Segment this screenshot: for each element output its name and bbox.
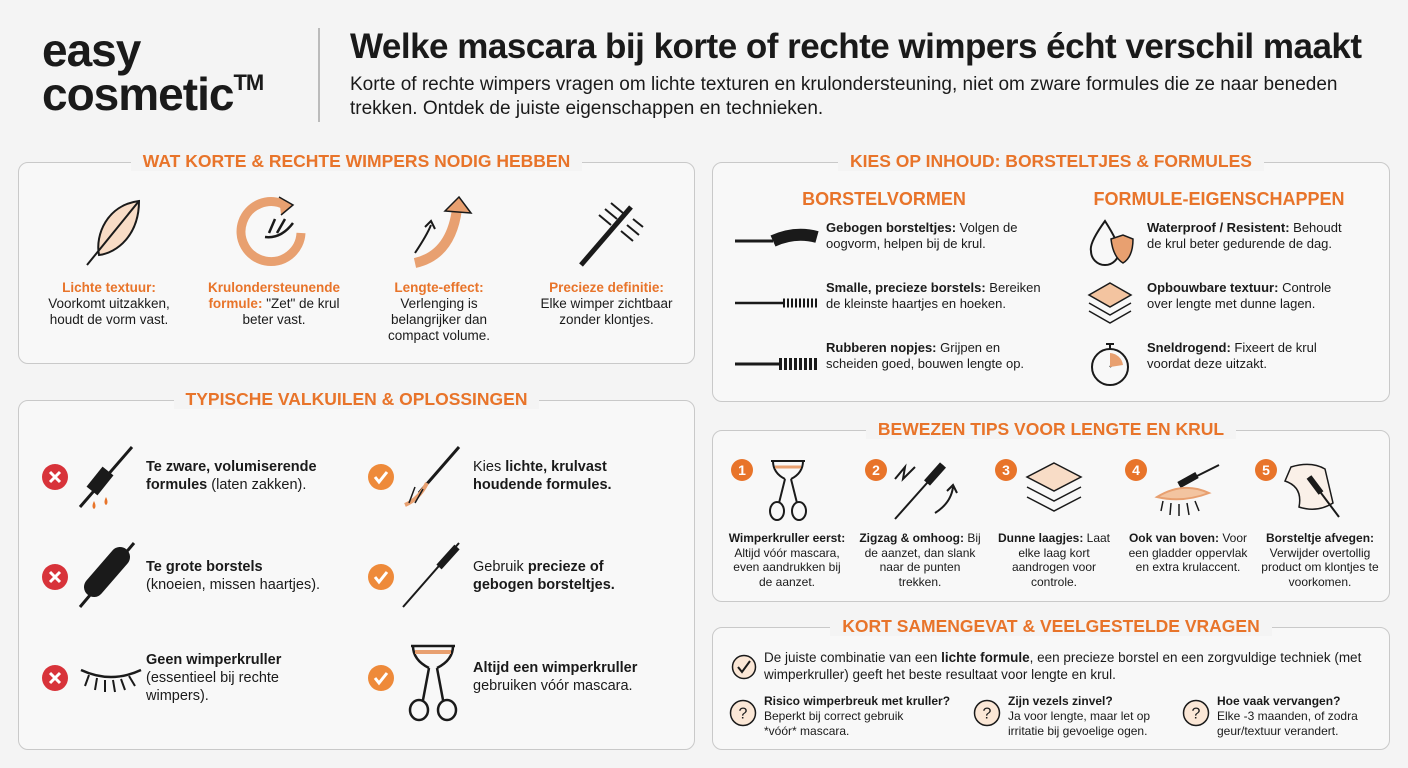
panel: summary & FAQ: [712, 627, 1390, 750]
panel: brushes & formulas: [712, 162, 1390, 402]
tip 3: 3: [1002, 462, 1010, 478]
faq 3: Hoe vaak vervangen?: [1217, 694, 1340, 708]
panel: tips: Zigzag & omhoog: Bij de aanzet, dan slank naar de punten trekken.: [859, 531, 981, 588]
subheading: formulas: FORMULE-EIGENSCHAPPEN: [1093, 189, 1344, 209]
faq 3: Elke -3 maanden, of zodra geur/textuur verandert.: [1217, 709, 1358, 738]
faq 2: Ja voor lengte, maar let op irritatie bij gevoelige ogen.: [1008, 709, 1150, 738]
text: definition: Precieze definitie:: [549, 280, 664, 295]
panel: pitfalls: [18, 400, 695, 750]
faq 1: ?: [739, 706, 748, 722]
text: KORT SAMENGEVAT & VEELGESTELDE VRAGEN: [842, 616, 1260, 636]
row 3: [42, 644, 638, 722]
row 3: Geen wimperkruller: [146, 652, 281, 668]
tip 4: [1125, 459, 1147, 481]
icon: feather: [86, 200, 140, 266]
panel: tips: Wimperkruller eerst: Altijd vóór mascara, even aandrukken bij de aanzet.: [729, 531, 845, 588]
brush 1: [735, 228, 819, 246]
tip 4: 4: [1132, 462, 1140, 478]
panel: brushes & formulas: Gebogen borsteltjes: Volgen de oogvorm, helpen bij de krul.: [826, 220, 1017, 251]
row 3: gebruiken vóór mascara.: [473, 678, 633, 694]
subheading: brushes: BORSTELVORMEN: [802, 189, 966, 209]
text: TYPISCHE VALKUILEN & OPLOSSINGEN: [186, 389, 527, 409]
row 3: wimpers).: [146, 688, 209, 704]
panel: brushes & formulas: Rubberen nopjes: Grijpen en scheiden goed, bouwen lengte op.: [826, 340, 1024, 371]
brush 3: [735, 358, 817, 370]
tip 5: 5: [1262, 462, 1270, 478]
text: length: Verlenging is belangrijker dan compact volume.: [388, 296, 490, 343]
formula 3: [1091, 343, 1129, 386]
icon: length arrow: [414, 196, 472, 268]
row 1: houdende formules.: [473, 477, 612, 493]
subtitle: Korte of rechte wimpers vragen om lichte texturen en krulondersteuning, niet om zware formules die ze naar beneden trekken. Ontdek de juiste eigenschappen en technieken.: [350, 74, 1337, 119]
tip 2: [865, 459, 887, 481]
row 1: [42, 446, 612, 509]
row 1: Te zware, volumiserende: [146, 459, 317, 475]
text: BEWEZEN TIPS VOOR LENGTE EN KRUL: [878, 419, 1224, 439]
row 2: gebogen borsteltjes.: [473, 577, 615, 593]
summary text: De juiste combinatie van een lichte formule, een precieze borstel en een zorgvuldige techniek (met wimperkruller) geeft het beste resultaat voor lengte en krul.: [764, 650, 1361, 682]
formula 2: [1088, 282, 1132, 324]
formula 1: [1090, 219, 1134, 266]
text: KIES OP INHOUD: BORSTELTJES & FORMULES: [850, 151, 1252, 171]
brush 2: [735, 298, 817, 308]
row 1: Kies lichte, krulvast: [473, 459, 607, 475]
row 2: (knoeien, missen haartjes).: [146, 577, 320, 593]
faq 2: Zijn vezels zinvel?: [1008, 694, 1113, 708]
faq 3: ?: [1192, 706, 1201, 722]
faq 1: *vóór* mascara.: [764, 724, 849, 738]
panel: needs: [18, 162, 695, 364]
row 3: (essentieel bij rechte: [146, 670, 279, 686]
icon: check circle: [732, 654, 756, 680]
row 2: Gebruik precieze of: [473, 559, 604, 575]
tip 1: [731, 459, 753, 481]
panel: tips: Ook van boven: Voor een gladder oppervlak en extra krulaccent.: [1129, 531, 1247, 574]
tip 2: 2: [872, 462, 880, 478]
faq 2: [974, 694, 1150, 738]
icon: comb brush: [579, 202, 644, 267]
tip 1: 1: [738, 462, 746, 478]
row 2: Te grote borstels: [146, 559, 263, 575]
text: light texture: [48, 280, 170, 327]
panel: tips: [712, 430, 1390, 602]
faq 1: Risico wimperbreuk met kruller?: [764, 694, 950, 708]
panel: tips: Dunne laagjes: Laat elke laag kort aandrogen voor controle.: [998, 531, 1110, 588]
panel: brushes & formulas: Sneldrogend: Fixeert de krul voordat deze uitzakt.: [1147, 340, 1317, 371]
faq 1: [730, 694, 950, 738]
faq 3: [1182, 694, 1358, 738]
text: length: Lengte-effect:: [394, 280, 484, 295]
logo: cosmeticTM: [42, 68, 263, 120]
text: light texture: Lichte textuur:: [62, 280, 156, 295]
text: definition: Elke wimper zichtbaar zonder klontjes.: [540, 296, 673, 327]
faq 1: Beperkt bij correct gebruik: [764, 709, 903, 723]
panel: brushes & formulas: Opbouwbare textuur: Controle over lengte met dunne lagen.: [1147, 280, 1331, 311]
text: curl formula: Krulondersteunende formule: "Zet" de krul beter vast.: [208, 280, 340, 327]
row 3: Altijd een wimperkruller: [473, 660, 637, 676]
logo: easy: [42, 24, 140, 76]
text: definition: [540, 280, 673, 327]
logo: [42, 24, 263, 120]
panel: brushes & formulas: Waterproof / Resistent: Behoudt de krul beter gedurende de dag.: [1147, 220, 1342, 251]
panel: tips: Borsteltje afvegen: Verwijder overtollig product om klontjes te voorkomen.: [1261, 531, 1379, 588]
panel: brushes & formulas: Smalle, precieze borstels: Bereiken de kleinste haartjes en hoeken.: [826, 280, 1041, 311]
icon: curl: [236, 196, 306, 266]
text: light texture: Voorkomt uitzakken, houdt de vorm vast.: [48, 296, 170, 327]
text: WAT KORTE & RECHTE WIMPERS NODIG HEBBEN: [143, 151, 570, 171]
tip 5: [1255, 459, 1277, 481]
row 1: formules (laten zakken).: [146, 477, 306, 493]
title: Welke mascara bij korte of rechte wimpers écht verschil maakt: [350, 27, 1362, 66]
row 2: [42, 542, 615, 608]
tip 3: [995, 459, 1017, 481]
faq 2: ?: [983, 706, 992, 722]
